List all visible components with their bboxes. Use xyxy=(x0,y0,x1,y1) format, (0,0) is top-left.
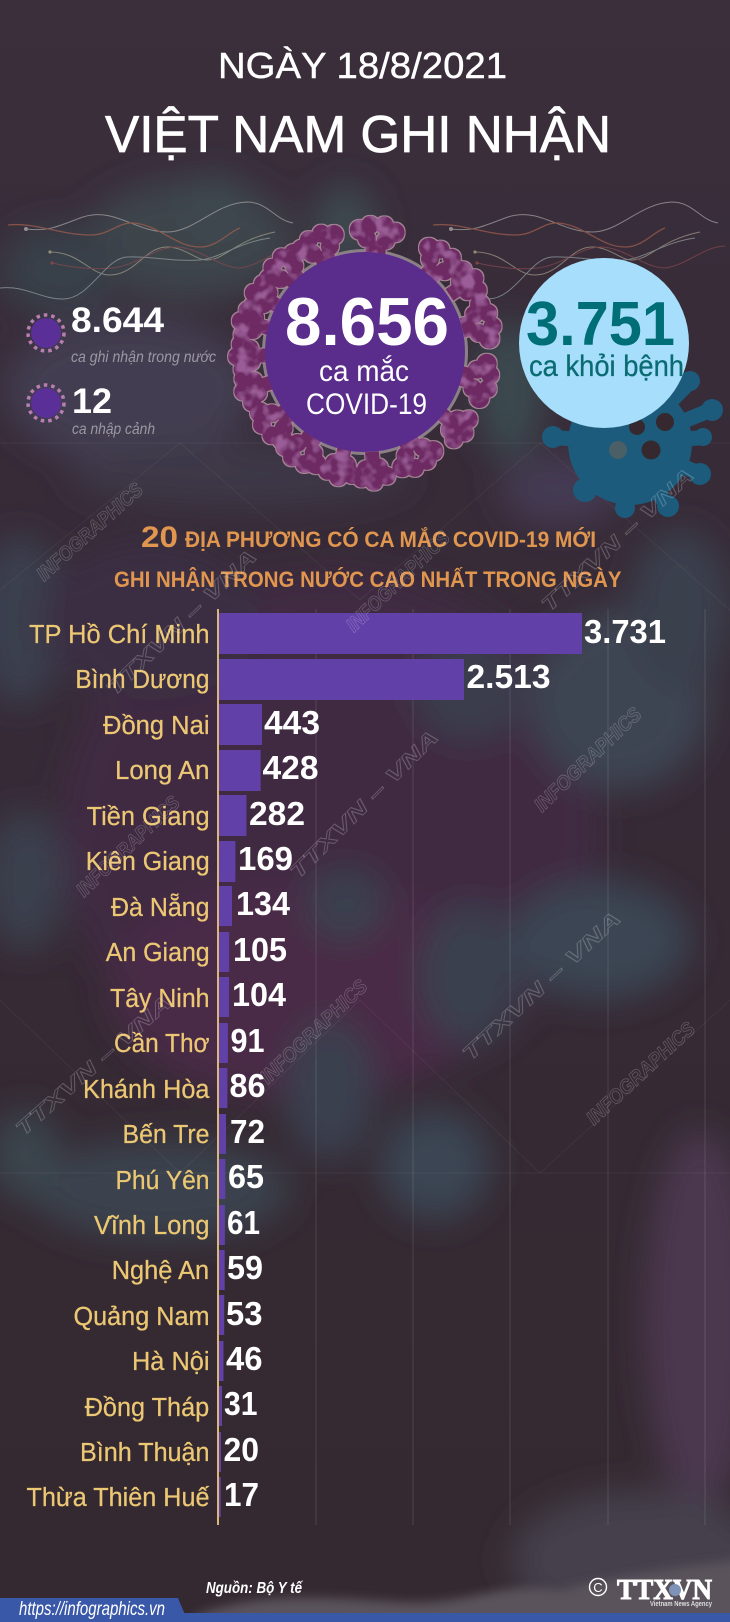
row: Bình Thuận: Bình Thuận xyxy=(80,1439,210,1467)
row: Bến Tre xyxy=(122,1113,265,1154)
row: Đà Nẵng: Đà Nẵng xyxy=(111,893,210,922)
row: Hà Nội xyxy=(132,1340,262,1381)
watermarks: TTXVN – VNA xyxy=(458,908,626,1066)
logo: TTXVN xyxy=(590,1574,712,1608)
row: Tiền Giang xyxy=(87,795,305,836)
row: Nghệ An xyxy=(112,1249,263,1290)
logo: TTXVN: C xyxy=(593,1580,603,1595)
logo: TTXVN: TTXVN xyxy=(617,1574,712,1606)
chart heading: GHI NHẬN TRONG NƯỚC CAO NHẤT TRONG NGÀY xyxy=(114,567,622,592)
decorative waves left xyxy=(0,202,300,299)
watermarks: INFOGRAPHICS xyxy=(530,703,647,817)
icon: large coronavirus xyxy=(227,213,506,492)
row: Đồng Nai: Đồng Nai xyxy=(103,712,210,740)
stat: imported cases: ca nhập cảnh xyxy=(72,421,155,438)
title main: VIỆT NAM GHI NHẬN xyxy=(105,106,611,164)
row: An Giang: An Giang xyxy=(106,939,210,967)
row: Đồng Nai xyxy=(103,704,320,745)
stat: domestic cases xyxy=(28,301,216,366)
recovered caption: ca khỏi bệnh xyxy=(529,350,684,383)
row: TP Hồ Chí Minh: 3.731 xyxy=(584,613,666,650)
watermarks: INFOGRAPHICS xyxy=(342,527,455,637)
row: Tây Ninh: Tây Ninh xyxy=(110,985,210,1013)
chart heading: ĐỊA PHƯƠNG CÓ CA MẮC COVID-19 MỚI xyxy=(185,527,596,552)
row: Khánh Hòa xyxy=(83,1067,266,1108)
watermarks: INFOGRAPHICS xyxy=(582,1018,700,1130)
row: Long An: 428 xyxy=(262,749,318,786)
total cases caption line 2: COVID-19 xyxy=(306,388,427,421)
row: Thừa Thiên Huế: 17 xyxy=(224,1476,259,1513)
row: Phú Yên xyxy=(116,1158,264,1199)
row: Đồng Tháp: 31 xyxy=(224,1385,258,1422)
watermarks: TTXVN – VNA xyxy=(102,546,261,701)
chart heading: 20 xyxy=(141,521,178,554)
row: Long An xyxy=(115,749,318,791)
stat: domestic cases: 8.644 xyxy=(71,301,165,340)
logo: TTXVN: Vietnam News Agency xyxy=(650,1601,712,1608)
row: Bến Tre: 72 xyxy=(230,1113,265,1150)
watermarks: INFOGRAPHICS xyxy=(256,975,373,1089)
icon: small virus xyxy=(28,385,64,421)
row: Nghệ An: 59 xyxy=(227,1249,263,1286)
footer url: https://infographics.vn xyxy=(19,1599,165,1620)
row: Tây Ninh: 104 xyxy=(232,976,287,1013)
row: Hà Nội: 46 xyxy=(226,1340,262,1377)
row: TP Hồ Chí Minh xyxy=(29,613,666,654)
decorative waves right xyxy=(425,202,725,299)
row: Vĩnh Long: 61 xyxy=(227,1204,260,1241)
recovered circle xyxy=(519,258,689,428)
row: An Giang xyxy=(106,931,287,972)
row: Cần Thơ xyxy=(114,1022,264,1063)
watermarks xyxy=(12,464,700,1141)
row: Thừa Thiên Huế: Thừa Thiên Huế xyxy=(26,1484,210,1512)
stat: domestic cases: ca ghi nhận trong nước xyxy=(71,349,216,366)
watermarks: TTXVN – VNA xyxy=(286,727,443,884)
source: Nguồn: Bộ Y tế xyxy=(206,1580,304,1597)
row: An Giang: 105 xyxy=(233,931,287,968)
row: Thừa Thiên Huế xyxy=(26,1476,259,1517)
row: Long An: Long An xyxy=(115,757,210,785)
row: Phú Yên: 65 xyxy=(228,1158,264,1195)
watermarks: INFOGRAPHICS xyxy=(33,479,148,586)
watermarks: INFOGRAPHICS xyxy=(72,792,185,902)
row: Kiên Giang: 169 xyxy=(238,840,293,877)
row: Tiền Giang: 282 xyxy=(249,795,305,832)
row: Cần Thơ: 91 xyxy=(230,1022,264,1059)
stat: imported cases xyxy=(28,382,155,438)
row: Tây Ninh xyxy=(110,976,287,1017)
row: Khánh Hòa: 86 xyxy=(230,1067,266,1104)
chart heading xyxy=(114,521,622,592)
icon: teal virus behind recovered circle xyxy=(542,371,723,518)
row: Bình Dương: Bình Dương xyxy=(75,666,209,694)
row: Đà Nẵng: 134 xyxy=(236,885,291,922)
row: Đà Nẵng xyxy=(111,885,291,926)
row: Bến Tre: Bến Tre xyxy=(122,1121,210,1149)
row: Đồng Tháp xyxy=(85,1385,258,1426)
row: Bình Dương xyxy=(75,658,551,700)
row: Tiền Giang: Tiền Giang xyxy=(87,803,210,831)
row: Quảng Nam xyxy=(74,1295,262,1335)
row: Kiên Giang xyxy=(86,840,293,882)
row: TP Hồ Chí Minh: TP Hồ Chí Minh xyxy=(29,621,210,649)
row: Quảng Nam: Quảng Nam xyxy=(74,1303,210,1331)
bar chart xyxy=(26,609,705,1525)
footer bar xyxy=(0,1598,730,1622)
total cases number: 8.656 xyxy=(285,284,449,360)
total cases caption line 1: ca mắc xyxy=(319,355,409,388)
row: Bình Thuận: 20 xyxy=(224,1431,259,1468)
row: Kiên Giang: Kiên Giang xyxy=(86,848,210,876)
watermarks: TTXVN – VNA xyxy=(537,464,699,617)
stat: imported cases: 12 xyxy=(72,382,112,421)
row: Đồng Tháp: Đồng Tháp xyxy=(85,1394,209,1422)
row: Đồng Nai: 443 xyxy=(264,704,320,741)
row: Nghệ An: Nghệ An xyxy=(112,1257,209,1285)
row: Quảng Nam: 53 xyxy=(226,1295,262,1332)
row: Phú Yên: Phú Yên xyxy=(116,1167,210,1195)
row: Cần Thơ: Cần Thơ xyxy=(114,1030,210,1058)
row: Bình Dương: 2.513 xyxy=(466,658,550,695)
row: Bình Thuận xyxy=(80,1431,259,1472)
row: Khánh Hòa: Khánh Hòa xyxy=(83,1076,210,1104)
watermarks: TTXVN – VNA xyxy=(12,992,176,1141)
row: Vĩnh Long xyxy=(94,1204,260,1245)
row: Vĩnh Long: Vĩnh Long xyxy=(94,1212,210,1240)
row: Hà Nội: Hà Nội xyxy=(132,1348,210,1376)
title date: NGÀY 18/8/2021 xyxy=(218,45,507,86)
recovered number: 3.751 xyxy=(526,290,675,359)
icon: small virus xyxy=(28,315,64,351)
